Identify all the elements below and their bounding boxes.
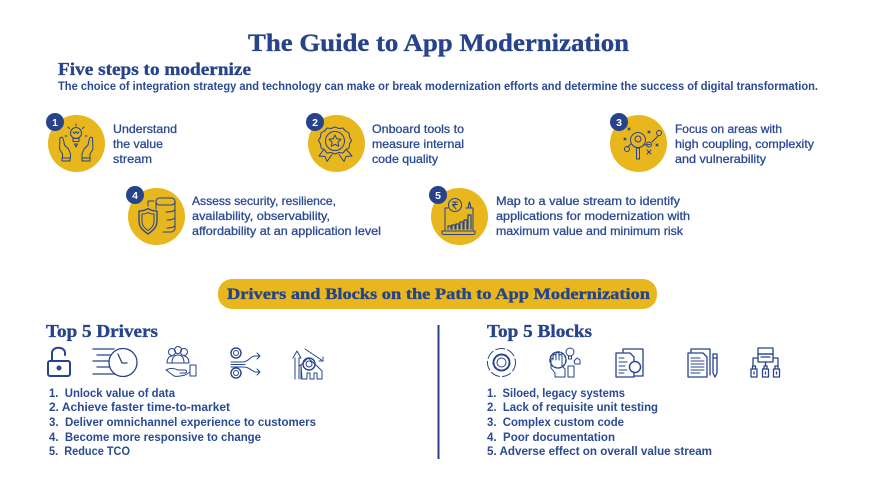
list: blocks: 3. Complex custom code bbox=[487, 415, 624, 429]
list: blocks: 2. Lack of requisite unit testing bbox=[487, 400, 658, 414]
step 2 text bbox=[372, 122, 464, 166]
icon: house with gear and arrows bbox=[293, 349, 323, 379]
step 4 text: Assess security, resilience, bbox=[192, 194, 336, 208]
step 5 text: applications for modernization with bbox=[496, 209, 690, 223]
step 2 text: measure internal bbox=[372, 137, 464, 151]
heading: top 5 blocks: Top 5 Blocks bbox=[487, 321, 592, 341]
heading: five steps: Five steps to modernize bbox=[58, 59, 251, 79]
icon: magnifier on graph bbox=[624, 128, 662, 159]
banner: drivers and blocks: Drivers and Blocks on the Path to App Modernization bbox=[227, 286, 650, 303]
step 5 text: maximum value and minimum risk bbox=[496, 224, 684, 238]
step 1 text: Understand bbox=[113, 122, 177, 136]
step 4 text bbox=[192, 194, 381, 238]
icon: people on hand bbox=[166, 346, 196, 376]
step 3 text bbox=[675, 122, 814, 166]
list: drivers: 5. Reduce TCO bbox=[49, 444, 130, 458]
list: drivers: 1. Unlock value of data bbox=[49, 386, 175, 400]
step 2 bbox=[306, 113, 464, 172]
badge: 3 bbox=[610, 113, 628, 131]
icon: hand with gear and bulb bbox=[550, 348, 580, 377]
step 1 text: stream bbox=[113, 152, 152, 166]
list: blocks: 5. Adverse effect on overall value stream bbox=[487, 444, 712, 458]
banner: drivers and blocks bbox=[218, 279, 657, 309]
panel: top 5 drivers bbox=[46, 321, 323, 458]
icon: gears with shuffle arrows bbox=[231, 348, 260, 378]
step 5 text bbox=[496, 194, 690, 238]
badge: 4: 4 bbox=[132, 190, 138, 202]
badge: 5 bbox=[429, 186, 447, 204]
list: blocks bbox=[487, 386, 712, 458]
badge: 2: 2 bbox=[312, 117, 318, 129]
list: blocks: 4. Poor documentation bbox=[487, 430, 615, 444]
icon: open padlock bbox=[48, 348, 70, 376]
step 4 text: availability, observability, bbox=[192, 209, 330, 223]
icon: fast clock bbox=[93, 348, 137, 376]
icon: document and pen bbox=[688, 349, 717, 377]
badge: 3: 3 bbox=[616, 117, 622, 129]
step 1 bbox=[46, 113, 177, 172]
badge: 2 bbox=[306, 113, 324, 131]
step 5 bbox=[429, 186, 690, 245]
step 1 text: the value bbox=[113, 137, 163, 151]
list: drivers: 2. Achieve faster time-to-market bbox=[49, 400, 230, 414]
icon: laptop with rupee chart bbox=[442, 198, 475, 234]
list: drivers bbox=[49, 386, 316, 458]
heading: top 5 drivers: Top 5 Drivers bbox=[46, 321, 158, 341]
step 3 bbox=[610, 113, 814, 172]
list: blocks: 1. Siloed, legacy systems bbox=[487, 386, 625, 400]
badge: 5: 5 bbox=[435, 190, 441, 202]
list: drivers: 3. Deliver omnichannel experience to customers bbox=[49, 415, 316, 429]
step 1 text bbox=[113, 122, 177, 166]
step 4 bbox=[126, 186, 381, 245]
step 3 text: Focus on areas with bbox=[675, 122, 782, 136]
icon: award rosette bbox=[318, 127, 352, 162]
step 3 text: and vulnerability bbox=[675, 152, 766, 166]
intro text: The choice of integration strategy and technology can make or break modernization efforts and determine the success of digital transformation. bbox=[58, 79, 818, 93]
step 5 text: Map to a value stream to identify bbox=[496, 194, 680, 208]
icon: hands with lightbulb bbox=[60, 124, 93, 161]
badge: 1: 1 bbox=[52, 117, 58, 129]
step 3 text: high coupling, complexity bbox=[675, 137, 814, 151]
icon: shield and database bbox=[139, 198, 175, 234]
icon: hierarchy of locked blocks bbox=[751, 348, 780, 377]
icon: gear in ring bbox=[488, 348, 516, 376]
step 2 text: code quality bbox=[372, 152, 438, 166]
title: The Guide to App Modernization bbox=[248, 30, 629, 57]
list: drivers: 4. Become more responsive to change bbox=[49, 430, 261, 444]
step 2 text: Onboard tools to bbox=[372, 122, 464, 136]
icon: documents with gear bbox=[616, 349, 643, 377]
badge: 4 bbox=[126, 186, 144, 204]
step 4 text: affordability at an application level bbox=[192, 224, 381, 238]
panel: top 5 blocks bbox=[487, 321, 780, 458]
